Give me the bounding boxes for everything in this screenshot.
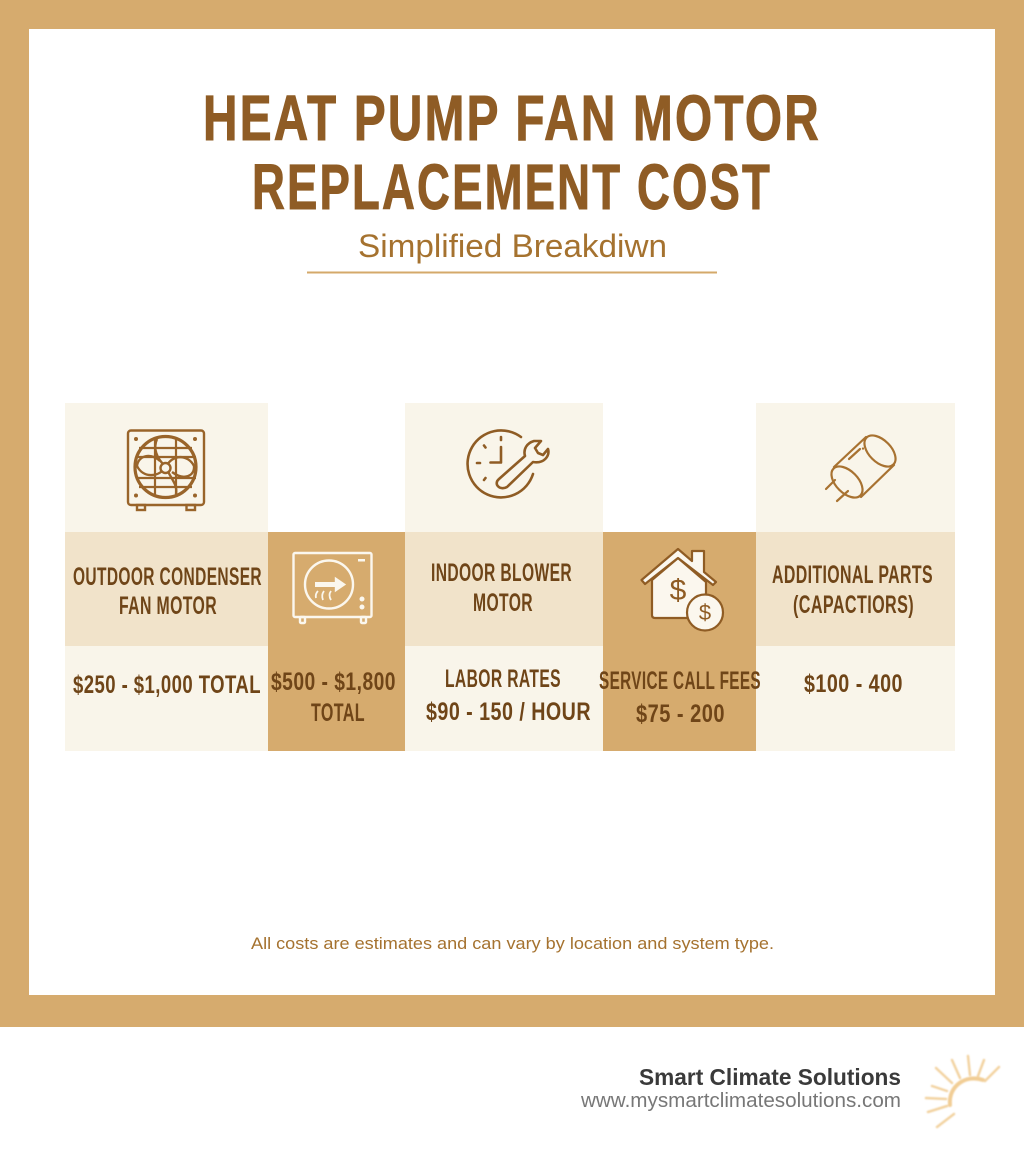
panel: indoor blower motor	[405, 403, 603, 751]
heading text: OUTDOOR CONDENSER	[73, 563, 262, 591]
price text: $100 - 400	[804, 670, 903, 698]
title: REPLACEMENT COST	[252, 151, 772, 223]
price text: LABOR RATES	[445, 665, 561, 693]
background	[603, 532, 756, 751]
heading text: INDOOR BLOWER	[431, 559, 572, 587]
price text: $90 - 150 / HOUR	[426, 698, 591, 726]
icon: capacitor	[826, 430, 901, 503]
price text	[599, 667, 761, 728]
icon cell	[65, 403, 268, 532]
price cell	[405, 646, 603, 751]
price text: $500 - $1,800	[271, 668, 396, 696]
icon: house with dollar	[642, 549, 723, 630]
heading text: MOTOR	[473, 589, 533, 617]
icon: house with dollar: $	[699, 600, 711, 625]
website: www.mysmartclimatesolutions.com	[580, 1090, 901, 1112]
price text	[426, 665, 591, 726]
heading text: FAN MOTOR	[119, 592, 217, 620]
brand name: Smart Climate Solutions	[639, 1064, 901, 1090]
panel: service call fees	[599, 532, 761, 751]
icon: indoor unit with arrow	[294, 553, 372, 623]
heading text	[73, 563, 262, 620]
icon: outdoor fan unit	[128, 430, 204, 510]
price text: $75 - 200	[636, 700, 725, 728]
heading cell	[405, 532, 603, 646]
heading text: (CAPACTIORS)	[793, 591, 914, 619]
title: HEAT PUMP FAN MOTOR	[203, 82, 821, 154]
price cell	[756, 646, 955, 751]
panel: additional parts	[756, 403, 955, 751]
heading cell	[65, 532, 268, 646]
price text: $250 - $1,000 TOTAL	[73, 671, 261, 699]
heading text	[431, 559, 572, 617]
panel: outdoor condenser fan motor	[65, 403, 268, 751]
price text: SERVICE CALL FEES	[599, 667, 761, 695]
heading cell	[756, 532, 955, 646]
icon: sun logo	[926, 1056, 999, 1127]
heading text	[772, 561, 933, 619]
icon: clock and wrench	[468, 430, 548, 497]
icon: house with dollar: $	[670, 574, 687, 607]
subtitle: Simplified Breakdiwn	[358, 228, 667, 264]
price text: TOTAL	[311, 699, 365, 727]
footnote: All costs are estimates and can vary by location and system type.	[251, 935, 774, 953]
background	[268, 532, 405, 751]
icon cell	[756, 403, 955, 532]
panel: indoor unit total	[268, 532, 405, 751]
title	[203, 82, 821, 223]
heading text: ADDITIONAL PARTS	[772, 561, 933, 589]
icon cell	[405, 403, 603, 532]
price text	[271, 668, 396, 727]
price cell	[65, 646, 268, 751]
